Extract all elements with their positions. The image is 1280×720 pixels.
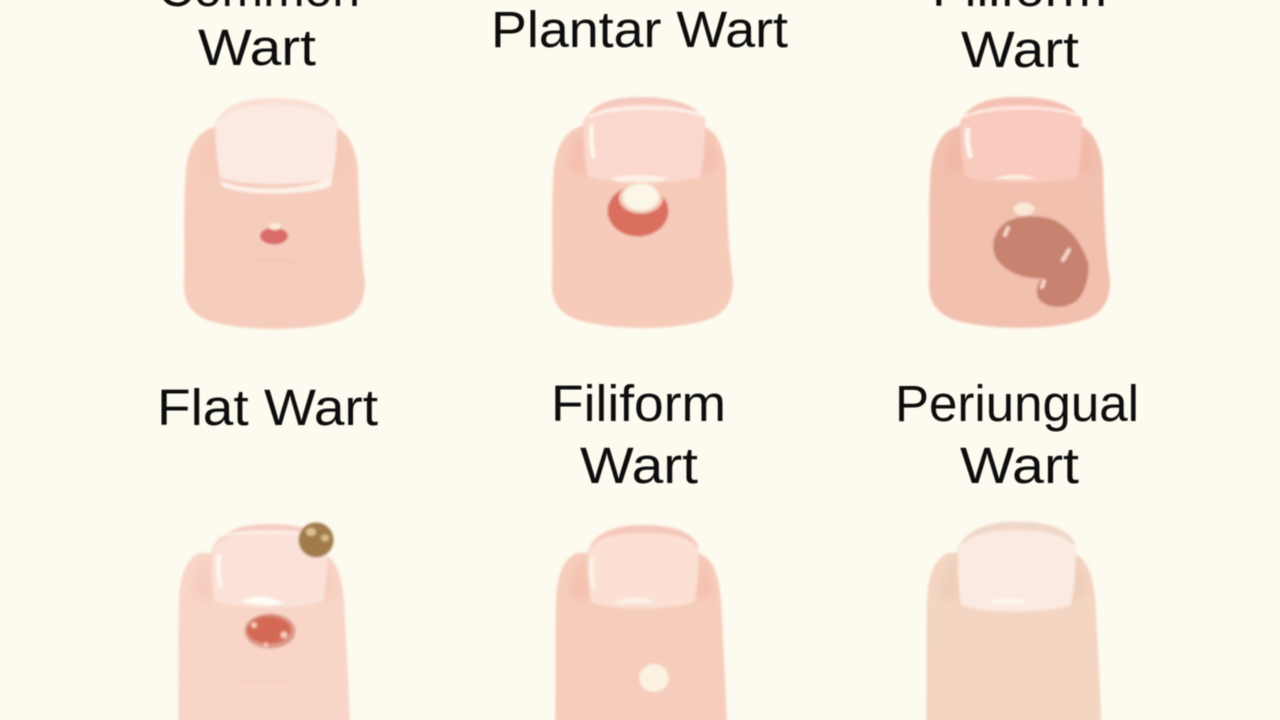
heading: common wart: Wart — [198, 19, 316, 76]
panel: common wart — [158, 0, 365, 329]
panel: flat wart — [157, 379, 378, 720]
heading: periungual wart: Wart — [960, 437, 1079, 494]
panel: plantar wart — [491, 1, 788, 328]
heading: filiform wart, bottom: Wart — [580, 437, 698, 494]
wart: brown nodule — [298, 522, 334, 558]
heading: periungual wart: Periungual — [895, 375, 1139, 432]
heading: filiform wart, top: Wart — [961, 21, 1079, 78]
panel: periungual wart — [895, 375, 1139, 720]
illustration: finger with small white wart — [555, 525, 727, 720]
heading: flat wart: Flat Wart — [157, 379, 378, 436]
illustration: finger with plantar wart — [552, 97, 733, 328]
illustration: finger with common wart — [184, 98, 365, 329]
illustration: finger without visible wart — [926, 522, 1101, 720]
heading: periungual wart — [895, 375, 1139, 494]
wart: flat red patch — [244, 614, 296, 648]
heading: filiform wart, bottom: Filiform — [551, 375, 726, 432]
heading: common wart — [158, 0, 360, 76]
panel: filiform wart, top — [929, 0, 1110, 328]
illustration: finger with flat wart — [178, 522, 350, 720]
heading: filiform wart, top — [932, 0, 1107, 78]
heading: filiform wart, bottom — [551, 375, 726, 494]
panel: filiform wart, bottom — [551, 375, 727, 720]
heading: plantar wart: Plantar Wart — [491, 1, 788, 58]
illustration: finger with large wart — [929, 97, 1110, 328]
